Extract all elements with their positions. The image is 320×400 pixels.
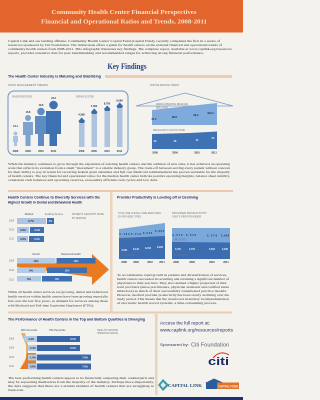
chart: quartile performance: -0.8% [28, 338, 35, 341]
paragraph: quartiles: break even. [8, 388, 24, 392]
chart: providers per center people icons: 2010 [38, 150, 44, 153]
chart: quartile performance [9, 329, 118, 370]
paragraph: industry summary: for their ability to pay in return for receiving federal grant subsidies and full cost Medicaid reimbursement has proven workable for the majority [8, 170, 230, 174]
chart: FTE employees area: 6,651 [122, 249, 128, 252]
chart: patient growth by service top: 3.9% [20, 238, 27, 241]
chart: FTE employees area: 5,716 [131, 233, 142, 236]
chart: FTE employees area: MID-LEVEL [121, 238, 134, 240]
chart: provider productivity area: 3,079 [207, 234, 218, 238]
chart: patient growth by service top: 2% [49, 220, 53, 223]
chart: quartile performance: 2010 [9, 357, 15, 359]
sponsor line: Citi Foundation [191, 342, 229, 348]
chart: provider productivity area: MID-LEVEL [174, 240, 187, 242]
logo: capital link [158, 379, 203, 391]
chart: positive financial trends house: 28 [174, 140, 177, 143]
chart: FTE employees area: 6,903 [155, 230, 165, 233]
logo: citi [208, 353, 229, 368]
chart: patient visits arrow bars: 7,462 [91, 105, 98, 108]
chart: provider productivity area: 2008 [173, 261, 179, 264]
chart: quartile performance: -0.8% [29, 366, 37, 368]
paragraph: industry summary: consistent cash balances and operating reserves, reasonably efficient cash cycles and low debt. [8, 178, 158, 183]
chart: positive financial trends house: MEDIAN OPERATING REVENUES [156, 103, 188, 106]
paragraph: productivity: study period. This means that the downward trend may be implementation [117, 297, 229, 301]
chart: FTE employees area: 9,042 [145, 247, 152, 250]
chart: providers per center people icons: 24.2 [51, 97, 57, 100]
chart: quartile performance: 75th Percentile [49, 329, 66, 332]
icon: orange diverging wedge [20, 333, 28, 369]
paragraph: productivity [117, 273, 230, 306]
intro text: resources sponsored by Citi Foundation. The initial issue offers a guide for health centers on the national financial and operational trends of [8, 43, 223, 47]
section heading: top and bottom quartiles: The Performance of Health Centers in the Top and Bottom Quartiles is Diverging [8, 318, 145, 322]
chart: quartile performance: 25th Percentile [21, 329, 38, 332]
chart: patient visits arrow bars: 2008 [79, 150, 85, 153]
area: median operating revenues [152, 103, 217, 125]
chart: provider productivity area: PHYSICIANS [174, 254, 188, 257]
chart: quartile performance: -0.4% [29, 347, 37, 350]
logo: citi: citi [208, 356, 229, 368]
chart: quartile performance: 2011 [9, 366, 15, 368]
sponsor line [160, 342, 229, 348]
chart: patient growth by service top: 0.3% [34, 238, 41, 241]
chart: providers per center people icons: 19.6 [39, 104, 44, 107]
chart: patient growth by service top: 3.6% [20, 229, 27, 232]
chart: provider productivity area: PROVIDER PRODUCTIVITY [172, 213, 208, 215]
chart: dental and behavioral growth with arrow: 8% [55, 278, 60, 281]
paragraph: industry summary [8, 162, 230, 183]
chart: quartile performance: -1.0% [29, 356, 37, 360]
chart: provider productivity area: 3,076 [172, 234, 183, 237]
chart: positive financial trends house: MEDIAN DAYS CASH ON HAND [153, 129, 185, 132]
chart: provider productivity area: 2011 [223, 261, 229, 264]
header banner [0, 0, 243, 32]
chart: positive financial trends house: 45 [196, 139, 199, 142]
paragraph: productivity: level providers (nurse practitioners, physician assistants and certified nurse [117, 285, 230, 290]
chart: providers per center people icons [12, 96, 61, 153]
section heading: diversify services: Health Centers Continue to Diversify Services with the [8, 196, 100, 200]
chart: quartile performance: OPERATING MARGIN [97, 332, 118, 335]
paragraph: quartiles: the data suggests that there are a sizable number of health centers that are struggling to [8, 384, 155, 388]
chart: providers per center people icons: 16.8 [26, 111, 31, 114]
paragraph: service growth: While all health center services are growing, dental and behavioral [8, 290, 108, 295]
chart: dental and behavioral growth with arrow: 2009 [9, 260, 15, 262]
chart: patient growth by service top: -0.2% [34, 229, 41, 232]
icon: house roof [136, 93, 233, 106]
chart: positive financial trends house: 29 [154, 140, 157, 143]
callout: access full report [160, 320, 233, 332]
chart: dental and behavioral growth with arrow: 9% [29, 270, 34, 272]
chart: FTE employees area: PHYSICIANS [121, 254, 135, 257]
chart: FTE employees area: 2008 [121, 261, 127, 264]
intro text: reports, provides extensive data for peer benchmarking and recommended ranges for achieving strong financial performance. [8, 51, 204, 56]
logo: capital fund [205, 378, 239, 389]
chart: dental and behavioral growth with arrow: 8% [27, 278, 32, 281]
paragraph: quartiles [8, 376, 155, 392]
chart: positive financial trends house: 50 [212, 137, 215, 140]
chart: dental and behavioral growth with arrow [9, 253, 109, 285]
chart: quartile performance: 8.2% [70, 347, 77, 350]
intro text: Capital Link and our lending affiliate, Community Health Center Capital Fund (Capital Fund), recently completed the first in a series of [8, 39, 221, 44]
chart: positive financial trends house: $7.2 [152, 118, 157, 121]
chart: provider productivity area: 3,781 [175, 248, 182, 251]
paragraph: service growth: health services within health centers have been growing especially [8, 294, 108, 298]
callout: access full report: www.caplink.org/resources/reports [160, 328, 233, 332]
chart: positive financial trends house: $9.2 [194, 114, 199, 117]
chart: patient visits arrow bars: 8,700 [104, 102, 111, 106]
intro text [8, 39, 232, 56]
chart: providers per center people icons: 2011 [51, 150, 57, 153]
chart: quartile performance: 2009 [9, 348, 15, 350]
chart: dental and behavioral growth with arrow: 11% [65, 270, 70, 272]
paragraph: productivity: physicians to their practices. They also retained a higher proportion of mid- [117, 281, 227, 285]
chart: patient visits arrow bars: 2010 [104, 150, 110, 153]
chart: patient visits arrow bars: SERVICE SITES [76, 96, 94, 98]
chart: quartile performance: 8.1% [70, 338, 77, 341]
footer bar [0, 397, 243, 400]
chart: dental and behavioral growth with arrow: 13% [74, 260, 79, 263]
paragraph: industry summary: scale that reflects its evolution from a small "movement" to a sizable industry group. The trade-off between serving every patient without concern [8, 166, 230, 170]
chart: FTE employees area: 6,542 [143, 232, 153, 235]
label: staff management trends: STAFF MANAGEMENT TRENDS [8, 84, 49, 87]
chart: positive financial trends house: 2008 [152, 152, 158, 154]
chart: patient growth by service top: BY SERVICE [72, 218, 86, 220]
section heading: diversify services [8, 196, 100, 204]
paragraph: productivity: midwives) as much of their successfully transitioned practice models. [117, 289, 227, 293]
chart: FTE employees area: 2009 [133, 261, 139, 264]
intro text: community health centers from 2008-2011. This infographic illustrates key findings. The complete report, available at www.caplink.org/resources/ [8, 47, 232, 52]
chart: provider productivity area: 3,015 [186, 234, 197, 237]
chart: patient growth by service top: 2009 [9, 220, 15, 222]
paragraph: quartiles: may be separating themselves from the majority of the industry. Perhaps more importantly, [8, 380, 154, 385]
chart: quartile performance: 7.6% [82, 356, 89, 360]
chart: dental and behavioral growth with arrow: Behavioral Health [61, 253, 81, 256]
heading: key findings: Key Findings [108, 62, 146, 71]
paragraph: productivity: However, medical provider productivity has been slowly declining over the [117, 293, 230, 298]
chart: patient visits arrow bars: 2009 [91, 150, 97, 153]
chart: positive financial trends house: $8.8 [172, 116, 177, 119]
area: median days cash on hand [152, 132, 217, 149]
chart: FTE employees area: TOTAL TIME CLINICAL CARE EMPLOYEES [118, 212, 161, 215]
chart: dental and behavioral growth with arrow: 2010 [9, 270, 15, 272]
chart: FTE employees area: 2011 [159, 261, 165, 264]
chart: dental and behavioral growth with arrow: Dental [32, 253, 40, 256]
chart: patient visits arrow bars: 2011 [117, 150, 123, 153]
chart: providers per center people icons: 13.1 [13, 125, 19, 128]
chart: FTE employees area [118, 212, 165, 264]
chart: quartile performance: 2008 [9, 338, 15, 340]
chart: patient growth by service top: Enabling Services [45, 213, 64, 216]
header banner: Community Health Center Financial Perspectives [52, 9, 197, 16]
paragraph: productivity: To accommodate rapid growth in patients and diversification of services, [117, 273, 227, 278]
chart: patient growth by service top: 6.7% [28, 220, 35, 223]
paragraph: quartiles: The best-performing health centers appear to be financially outpacing their counterparts and [8, 376, 154, 380]
chart: FTE employees area: 5,130 [120, 233, 130, 236]
paragraph: service growth: with Medicaid and Full-time Equivalent Employees (FTEs). [8, 304, 94, 308]
chart: FTE employees area: BY PROVIDER TYPES [118, 216, 141, 218]
header banner: Financial and Operational Ratios and Trends, 2008-2011 [41, 18, 207, 26]
section heading: diversify services: Highest Growth in Dental and Behavioral Health [8, 200, 82, 204]
chart: patient visits arrow bars: 8,569 [116, 100, 123, 102]
chart: positive financial trends house: 2011 [211, 152, 217, 154]
chart: positive financial trends house: 2009 [172, 152, 178, 154]
chart: provider productivity area: 3,592 [209, 248, 216, 251]
chart: quartile performance: HEALTH CENTER [97, 329, 118, 332]
chart: providers per center people icons: 2008 [13, 150, 19, 153]
paragraph: service growth [8, 290, 109, 308]
paragraph: productivity: of electronic health record systems, a time-consuming process. [117, 301, 217, 306]
callout: access full report: Access the full report at: [160, 320, 210, 326]
chart: providers per center people icons: 2009 [25, 150, 31, 153]
chart: patient visits arrow bars [76, 96, 123, 153]
section heading: provider productivity: Provider Productivity is Leveling off or Declining [117, 196, 198, 200]
panel: staff management [8, 91, 128, 155]
chart: FTE employees area: 9,920 [157, 246, 164, 249]
chart: provider productivity area: 3,536 [222, 248, 229, 251]
chart: patient growth by service top: Medical [25, 214, 34, 216]
chart: dental and behavioral growth with arrow: 13% [33, 260, 39, 263]
chart: positive financial trends house: $10.2 [208, 112, 214, 115]
chart: provider productivity area [172, 213, 230, 264]
sponsor line: Sponsored by: [160, 343, 189, 347]
label: positive financial trends: POSITIVE FINANCIAL TRENDS [150, 84, 179, 87]
chart: provider productivity area: 2010 [209, 261, 215, 264]
chart: providers per center people icons: PROVIDERS (PER CENTER) [12, 96, 32, 98]
chart: FTE employees area: 8,126 [133, 248, 140, 251]
paragraph: industry summary: While the industry continues to grow through the expansion of existing health centers and the addition of new sites, it has achieved an operating [8, 162, 230, 167]
chart: positive financial trends house [136, 93, 233, 154]
chart: dental and behavioral growth with arrow: 2011 [9, 280, 15, 282]
paragraph: industry summary: of health centers. The key financial and operational ratios for the median health center indicate positive operating margins, balance sheet stability, [8, 174, 230, 179]
paragraph: service growth: fast over the last five years, as demand for services among those [8, 299, 109, 304]
chart: patient growth by service top [9, 213, 105, 242]
paragraph: productivity: health centers succeeded in recruiting and retaining a significant number of [117, 277, 230, 281]
section heading: maturing and stabilizing: The Health Center Industry is Maturing and Stabilizing [8, 74, 101, 78]
chart: provider productivity area: 2009 [189, 261, 195, 264]
icon: orange growth arrow [17, 254, 109, 285]
chart: patient growth by service top: PATIENT GROWTH RATE [72, 213, 105, 216]
chart: FTE employees area: 2010 [147, 261, 153, 264]
chart: positive financial trends house: ($MILLIONS) [156, 108, 168, 110]
chart: provider productivity area: 3,752 [189, 248, 196, 251]
chart: patient growth by service top: 2011 [9, 238, 15, 240]
chart: positive financial trends house: 2010 [194, 152, 200, 154]
chart: provider productivity area: VISITS PER PROVIDER [172, 216, 201, 218]
chart: provider productivity area: 3,049 [221, 234, 230, 238]
chart: patient visits arrow bars: 4,598 [78, 114, 85, 116]
logo: capital link: CAPITAL LINK [168, 383, 203, 388]
chart: quartile performance: 7.6% [82, 366, 89, 368]
chart: patient growth by service top: 2010 [9, 230, 15, 232]
